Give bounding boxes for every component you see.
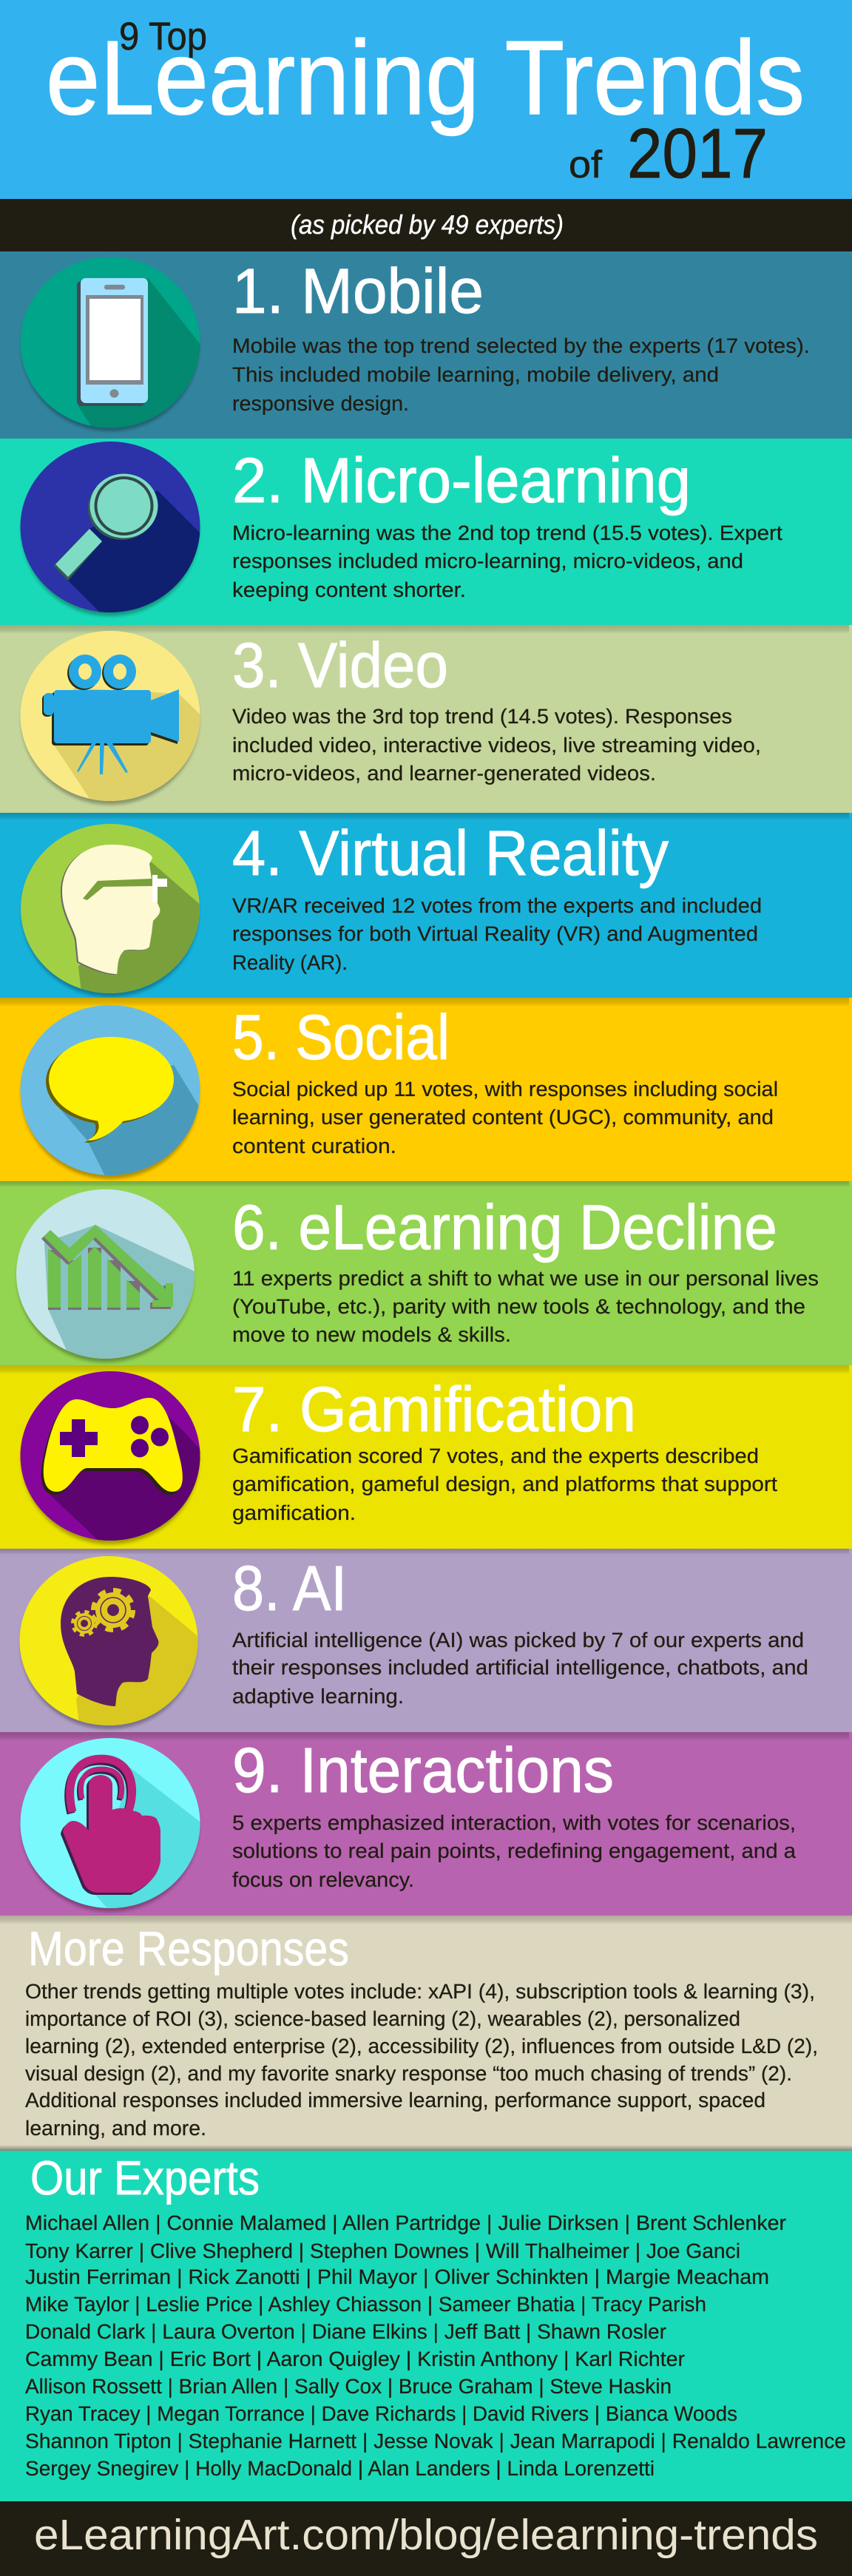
text block: VR/AR received 12 votes from the experts and included: [232, 894, 762, 917]
panel: More Responses: [0, 1916, 852, 2151]
heading: 2. Micro-learning: [232, 445, 691, 516]
heading: More Responses: [28, 1921, 349, 1975]
expert names: Donald Clark | Laura Overton | Diane Elkins | Jeff Batt | Shawn Rosler: [25, 2320, 666, 2343]
icon: head with gears: [19, 1556, 198, 1731]
panel: 5. Social: [0, 998, 852, 1183]
text block: learning (2), extended enterprise (2), accessibility (2), influences from outside L&D (2),: [25, 2035, 818, 2058]
text block: gamification.: [232, 1501, 356, 1524]
text block: Video was the 3rd top trend (14.5 votes). Responses: [232, 705, 732, 728]
text block: Reality (AR).: [232, 951, 348, 974]
text block: learning, and more.: [25, 2117, 206, 2140]
text block: 11 experts predict a shift to what we use in our personal lives: [232, 1267, 819, 1290]
icon: video camera: [21, 631, 214, 810]
text block: Artificial intelligence (AI) was picked by 7 of our experts and: [232, 1629, 804, 1652]
text block: micro-videos, and learner-generated videos.: [232, 762, 656, 785]
text block: solutions to real pain points, redefining engagement, and a: [232, 1839, 796, 1862]
heading: 3. Video: [232, 630, 448, 701]
subtitle bar: (as picked by 49 experts): [291, 209, 564, 240]
expert names: Michael Allen | Connie Malamed | Allen Partridge | Julie Dirksen | Brent Schlenker: [25, 2211, 786, 2234]
text block: [232, 705, 761, 785]
text block: importance of ROI (3), science-based learning (2), wearables (2), personalized: [25, 2007, 740, 2030]
icon: magnifying glass: [21, 442, 214, 621]
text block: move to new models & skills.: [232, 1323, 511, 1346]
expert names: Shannon Tipton | Stephanie Harnett | Jesse Novak | Jean Marrapodi | Renaldo Lawrence: [25, 2430, 846, 2452]
panel: 2. Micro-learning: [0, 439, 852, 625]
text block: Mobile was the top trend selected by the experts (17 votes).: [232, 334, 810, 357]
heading: 5. Social: [232, 1002, 450, 1073]
icon: speech bubble: [21, 1005, 214, 1183]
text block: adaptive learning.: [232, 1685, 404, 1708]
panel: 8. AI: [0, 1549, 852, 1738]
text block: Gamification scored 7 votes, and the experts described: [232, 1444, 759, 1467]
title: 9 Top: 9 Top: [119, 15, 207, 58]
text block: [232, 521, 782, 601]
text block: their responses included artificial intelligence, chatbots, and: [232, 1656, 808, 1679]
text block: responsive design.: [232, 392, 409, 415]
text block: [232, 1629, 808, 1708]
panel: 9. Interactions: [0, 1732, 852, 1923]
text block: content curation.: [232, 1135, 396, 1157]
text block: Other trends getting multiple votes include: xAPI (4), subscription tools & learning (3),: [25, 1980, 815, 2003]
heading: 4. Virtual Reality: [232, 818, 669, 889]
heading: 1. Mobile: [232, 256, 484, 327]
expert names: [25, 2211, 846, 2480]
footer URL bar: [0, 2501, 852, 2576]
icon: game controller: [19, 1371, 201, 1546]
expert names: Sergey Snegirev | Holly MacDonald | Alan Landers | Linda Lorenzetti: [25, 2457, 655, 2480]
text block: This included mobile learning, mobile delivery, and: [232, 363, 719, 386]
icon: declining chart: [16, 1189, 207, 1368]
text block: responses for both Virtual Reality (VR) and Augmented: [232, 922, 758, 945]
text block: learning, user generated content (UGC), community, and: [232, 1106, 774, 1129]
text block: [232, 1267, 819, 1346]
expert names: Allison Rossett | Brian Allen | Sally Cox | Bruce Graham | Steve Haskin: [25, 2375, 672, 2398]
expert names: Justin Ferriman | Rick Zanotti | Phil Mayor | Oliver Schinkten | Margie Meacham: [25, 2265, 769, 2288]
heading: 9. Interactions: [232, 1735, 614, 1806]
panel: 7. Gamification: [0, 1365, 852, 1553]
icon: head with smart glasses: [20, 824, 200, 998]
panel: Our Experts: [0, 2151, 852, 2501]
text block: [232, 894, 762, 974]
heading: 8. AI: [232, 1553, 347, 1624]
heading: 7. Gamification: [232, 1374, 636, 1445]
panel: 3. Video: [0, 625, 852, 814]
text block: Social picked up 11 votes, with responses including social: [232, 1078, 778, 1101]
text block: keeping content shorter.: [232, 578, 466, 601]
heading: 6. eLearning Decline: [232, 1192, 777, 1263]
text block: visual design (2), and my favorite snarky response “too much chasing of trends” (2).: [25, 2062, 792, 2085]
text block: [25, 1980, 818, 2140]
icon: touch hand: [19, 1738, 201, 1914]
panel: 4. Virtual Reality: [0, 813, 852, 1006]
expert names: Tony Karrer | Clive Shepherd | Stephen Downes | Will Thalheimer | Joe Ganci: [25, 2239, 740, 2262]
expert names: Mike Taylor | Leslie Price | Ashley Chiasson | Sameer Bhatia | Tracy Parish: [25, 2293, 706, 2316]
heading: Our Experts: [30, 2151, 260, 2205]
text block: included video, interactive videos, live streaming video,: [232, 734, 761, 757]
text block: 5 experts emphasized interaction, with votes for scenarios,: [232, 1811, 796, 1834]
text block: Micro-learning was the 2nd top trend (15.5 votes). Expert: [232, 521, 782, 544]
header panel: [0, 0, 852, 199]
text block: Additional responses included immersive learning, performance support, spaced: [25, 2089, 765, 2112]
text block: gamification, gameful design, and platforms that support: [232, 1473, 777, 1495]
panel: 6. eLearning Decline: [0, 1181, 852, 1368]
text block: [232, 334, 810, 415]
subtitle bar: [0, 199, 852, 251]
text block: (YouTube, etc.), parity with new tools & technology, and the: [232, 1295, 805, 1318]
panel: 1. Mobile: [0, 251, 852, 444]
title: of: of: [569, 143, 603, 186]
title: eLearning Trends: eLearning Trends: [46, 19, 805, 137]
footer URL bar: eLearningArt.com/blog/elearning-trends: [34, 2511, 818, 2559]
text block: focus on relevancy.: [232, 1868, 414, 1891]
text block: responses included micro-learning, micro-videos, and: [232, 550, 743, 572]
text block: [232, 1078, 778, 1157]
expert names: Ryan Tracey | Megan Torrance | Dave Richards | David Rivers | Bianca Woods: [25, 2402, 737, 2425]
text block: [232, 1444, 777, 1524]
expert names: Cammy Bean | Eric Bort | Aaron Quigley | Kristin Anthony | Karl Richter: [25, 2347, 685, 2370]
text block: [232, 1811, 796, 1891]
title: 2017: 2017: [627, 115, 768, 193]
icon: mobile phone: [20, 257, 200, 433]
